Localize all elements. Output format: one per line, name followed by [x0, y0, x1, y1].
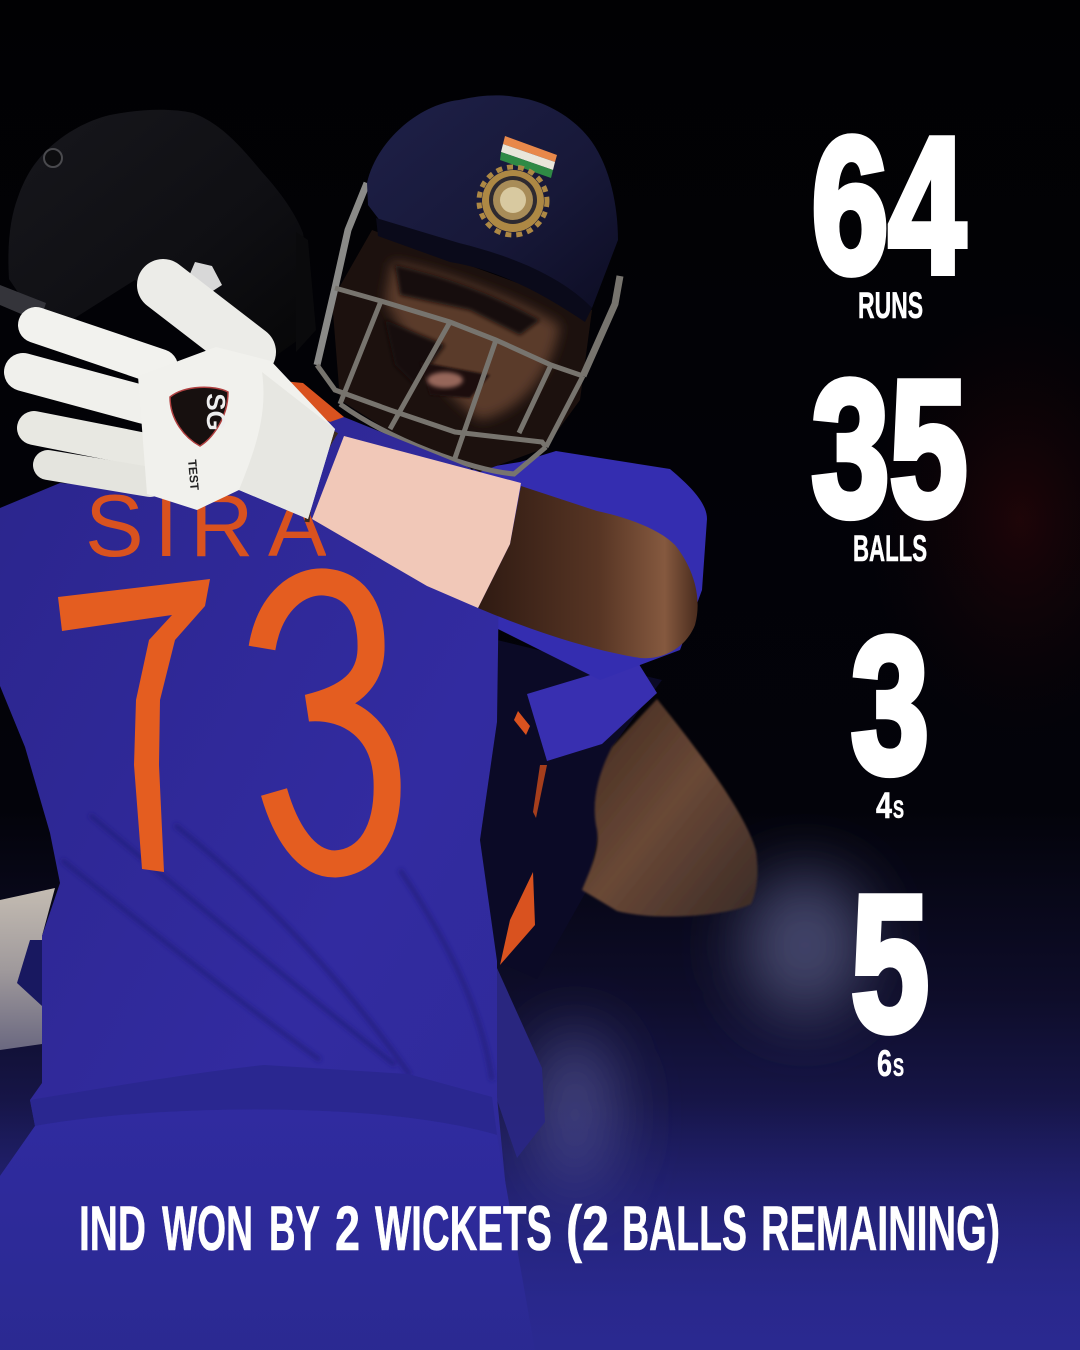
forearm, glove and wrist wrap: [23, 285, 698, 658]
icon: helmet crest: [479, 167, 547, 235]
stat: 5 sixes: 6: [877, 1043, 892, 1084]
icon: batting glove: TEST: [185, 459, 202, 491]
stat: 3 fours: 4: [876, 785, 892, 826]
player: black helmet: [0, 110, 316, 360]
result headline: WON: [162, 1194, 253, 1264]
stat: 64 runs: 64: [812, 97, 966, 313]
trouser waistband: [30, 1065, 497, 1135]
result headline: IND: [79, 1194, 146, 1264]
rolled sleeve: [527, 661, 657, 761]
jersey hem piece: [497, 968, 545, 1158]
jersey name: SIRAJ: [85, 476, 379, 575]
result headline: (2: [566, 1194, 609, 1264]
forearm: [478, 486, 698, 658]
stat: 3 fours: S: [893, 796, 904, 824]
shoulder sleeve: [470, 451, 707, 680]
icon: batting glove: [23, 285, 335, 519]
result headline: BY: [269, 1194, 320, 1264]
wrist wrap: [312, 436, 521, 608]
result headline: WICKETS: [375, 1194, 552, 1264]
player: batter in navy helmet: [317, 95, 757, 1158]
stat: 3 fours: [851, 597, 929, 826]
icon: face grille: [317, 183, 620, 474]
stat: 35 balls: BALLS: [853, 528, 927, 569]
orange collar: [262, 379, 344, 422]
stat: 5 sixes: S: [893, 1054, 904, 1082]
dark side of torso: [480, 640, 662, 979]
result headline: BALLS: [622, 1194, 747, 1264]
icon: SG logo: [170, 387, 231, 446]
stat: 3 fours: 3: [851, 597, 929, 813]
stat: 5 sixes: [851, 855, 929, 1084]
stat: 64 runs: RUNS: [858, 285, 923, 326]
stat: 5 sixes: 5: [851, 855, 929, 1071]
icon: india flag: [500, 136, 557, 178]
stat: 64 runs: [812, 97, 966, 326]
player: jersey back number 73: [0, 379, 535, 1350]
navy helmet: [367, 95, 618, 308]
jersey folds: [62, 815, 492, 1080]
result headline: 2: [335, 1194, 360, 1264]
face and neck: [332, 230, 592, 472]
lower arm: [582, 699, 757, 917]
bottom colour fade: [0, 1100, 1080, 1350]
number 73: [58, 579, 387, 872]
stat: 35 balls: 35: [812, 340, 968, 556]
icon: SG logo: SG: [201, 393, 231, 431]
stat: 35 balls: [812, 340, 968, 569]
result headline: [79, 1194, 1000, 1264]
